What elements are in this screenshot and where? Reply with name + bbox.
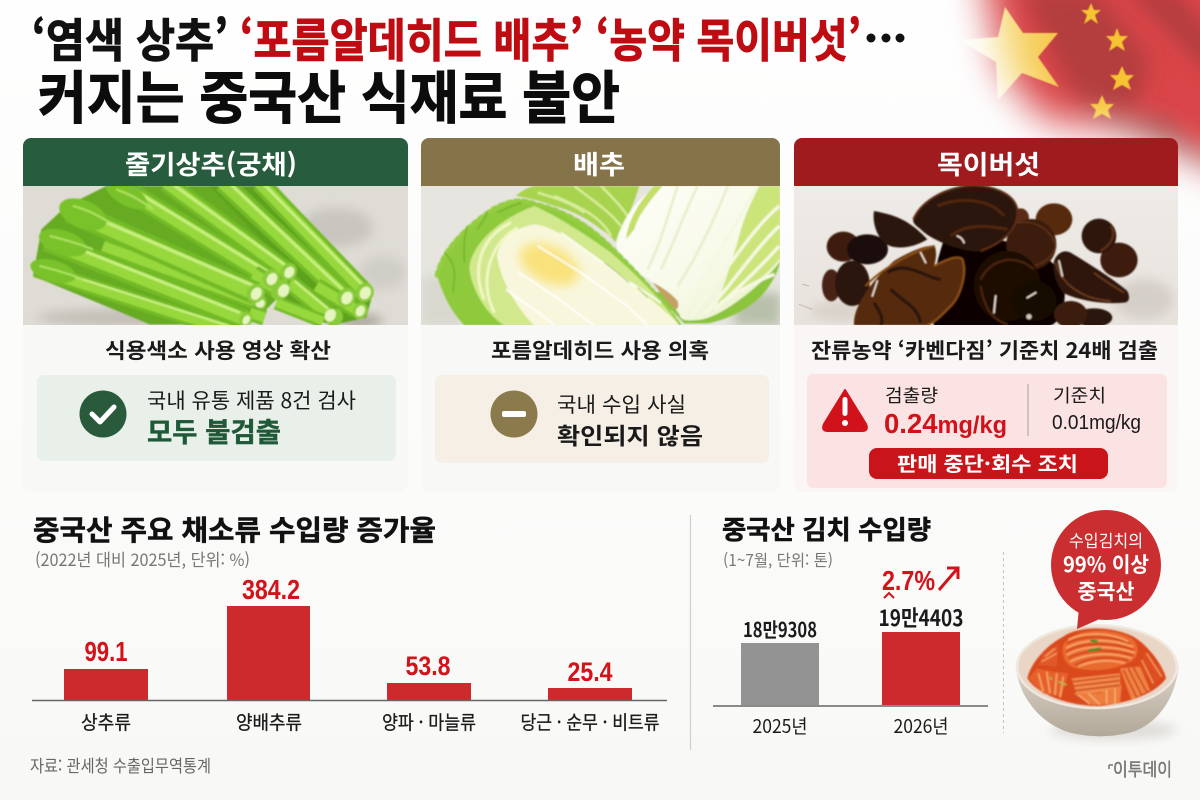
bar: 2026: 19만4403 [878,601,964,633]
detection box [807,374,1167,488]
standard label: 기준치 [1053,382,1106,408]
detected value: 0.24mg/kg [884,408,1007,439]
action badge: 판매 중단·회수 조치 [897,448,1078,477]
small star 2 [1106,28,1128,51]
card background [23,138,408,492]
chart: 김치 수입량 [713,510,988,739]
bar: 2025: 18만9308 [743,614,817,643]
source: 자료: 관세청 수출입무역통계 [30,752,211,777]
bubble line 1: 수입김치의 [1069,527,1143,552]
bar: 양파 마늘류: 53.8 [406,651,450,681]
chart: 채소류 수입량 증가율 [32,509,667,735]
caret [884,593,894,598]
icon: minus [490,390,538,438]
card header [23,138,408,186]
divider [1027,384,1029,436]
result text: 국내 수입 사실 [557,389,686,419]
photo: wood ear mushroom [794,186,1179,328]
title line 1 black: ‘염색 상추’ [32,5,228,71]
card heading: 목이버섯 [937,145,1040,182]
bar: 상추류: 99.1 [84,636,128,667]
card header [794,138,1178,186]
result emphasis: 확인되지 않음 [557,417,703,451]
title line 2: 커지는 중국산 식재료 불안 [38,53,620,135]
dashed divider [1002,552,1004,733]
bar: 상추류: 상추류 [81,708,131,735]
chart title: 중국산 주요 채소류 수입량 증가율 [33,509,436,549]
bar: 2026 [878,601,964,739]
chart subtitle: (2022년 대비 2025년, 단위: %) [35,546,250,571]
axis [713,705,988,707]
bar: 당근 순무 비트류: 25.4 [568,657,612,687]
panel: 줄기상추 [23,138,408,492]
bar: 당근 순무 비트류: 당근 · 순무 · 비트류 [520,708,660,735]
result box [37,375,396,461]
result emphasis: 모두 불검출 [147,411,281,450]
bubble line 3: 중국산 [1078,576,1134,606]
bubble line 2: 99% 이상 [1063,549,1149,579]
bar: 2026: 2026년 [894,712,948,739]
title line 1 red second: ‘농약 목이버섯’ [596,5,861,71]
bar: 양파 마늘류 [382,651,476,735]
icon: warning triangle [823,390,867,431]
icon: check mark [80,390,126,438]
bar: 양배추류 [227,574,310,735]
change label: 2.7% [882,565,935,596]
title ellipsis [866,34,904,42]
logo: 이투데이 [1113,756,1172,782]
arrow up [939,568,958,590]
bar: 2025: 2025년 [752,712,808,739]
card heading: 배추 [573,145,625,182]
subheading: 식용색소 사용 영상 확산 [105,335,331,365]
bar: 양배추류: 양배추류 [236,708,302,735]
callout bubble [1051,510,1161,629]
big star [959,7,1059,100]
subheading: 잔류농약 ‘카벤다짐’ 기준치 24배 검출 [811,335,1158,365]
photo: napa cabbage [421,186,781,326]
chinese flag decoration [957,0,1200,192]
axis [32,700,667,702]
chart title: 중국산 김치 수입량 [722,510,931,547]
illustration: kimchi bowl [1016,624,1179,740]
bar: 양배추류: 384.2 [242,574,300,605]
bar: 당근 순무 비트류 [520,657,660,735]
result text: 국내 유통 제품 8건 검사 [147,385,356,415]
bar: 2025 [741,614,819,739]
panel: 목이버섯 [794,138,1179,492]
front half [437,202,639,325]
title line 1 red: ‘포름알데히드 배추’ [240,5,583,71]
panel: 배추 [421,138,781,492]
small star 1 [1081,3,1101,24]
standard value: 0.01mg/kg [1052,412,1141,434]
card header [421,138,780,186]
detected label: 검출량 [885,382,938,408]
photo: stem lettuce [23,186,408,325]
section divider [690,515,692,750]
card background [794,138,1178,492]
small star 4 [1090,95,1114,119]
subheading: 포름알데히드 사용 의혹 [491,335,709,365]
bar: 양파 마늘류: 양파 · 마늘류 [382,708,476,735]
back right half [654,261,780,323]
card background [421,138,780,492]
result box [435,375,769,463]
action badge [869,448,1108,479]
chart subtitle: (1~7월, 단위: 톤) [723,547,833,571]
bar: 상추류 [64,636,148,735]
small star 3 [1110,66,1134,90]
title [32,5,904,135]
card heading: 줄기상추(궁채) [125,145,297,182]
